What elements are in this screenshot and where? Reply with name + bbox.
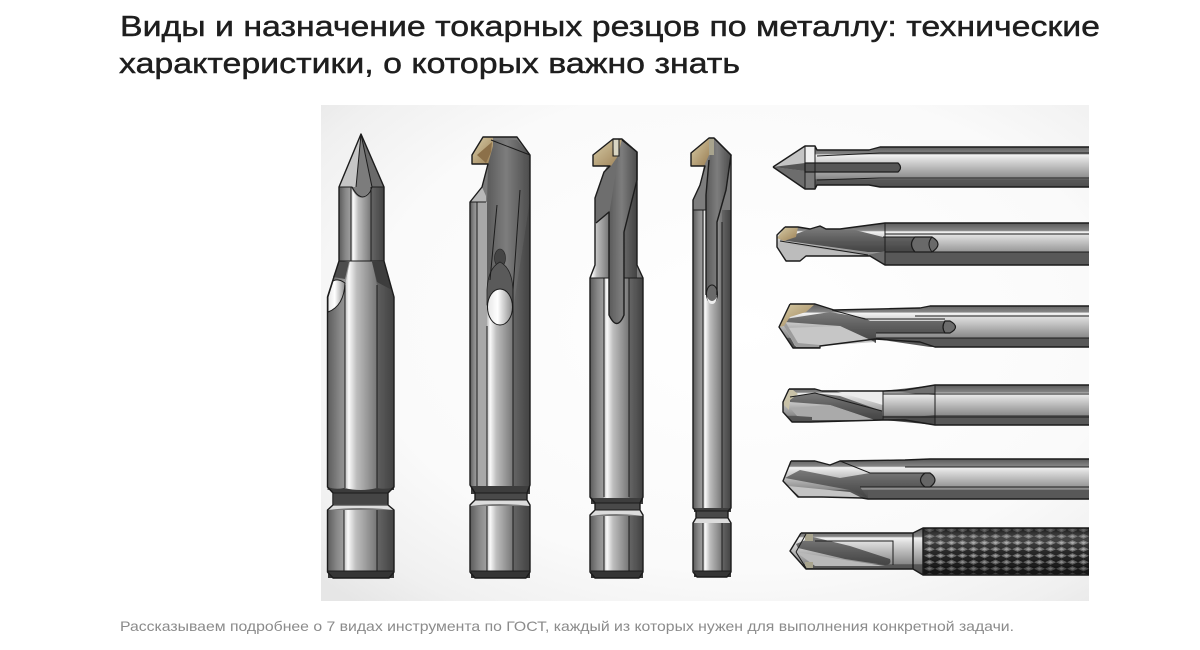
tool: horizontal cutter 4 [783, 385, 1089, 425]
title [119, 11, 1100, 80]
tool: horizontal cutter 5 [783, 459, 1089, 499]
tool: horizontal cutter 3 [779, 304, 1089, 348]
tool: horizontal cutter 1 [773, 146, 1089, 189]
tool: vertical cutter 4 [691, 138, 731, 577]
tool: horizontal cutter 6 with knurled grip [790, 528, 1089, 575]
title: Виды и назначение токарных резцов по металлу: технические [120, 11, 1100, 43]
tool: vertical cutter 1 [328, 134, 394, 578]
image background panel [321, 105, 1089, 601]
tool: vertical cutter 2 [470, 137, 530, 578]
title: характеристики, о которых важно знать [119, 48, 740, 80]
illustration: cutting tools [321, 105, 1089, 601]
caption: Рассказываем подробнее о 7 видах инструмента по ГОСТ, каждый из которых нужен для выполнения конкретной задачи. [120, 618, 1014, 634]
tool: horizontal cutter 2 [777, 223, 1089, 265]
tool: vertical cutter 3 [590, 139, 643, 578]
